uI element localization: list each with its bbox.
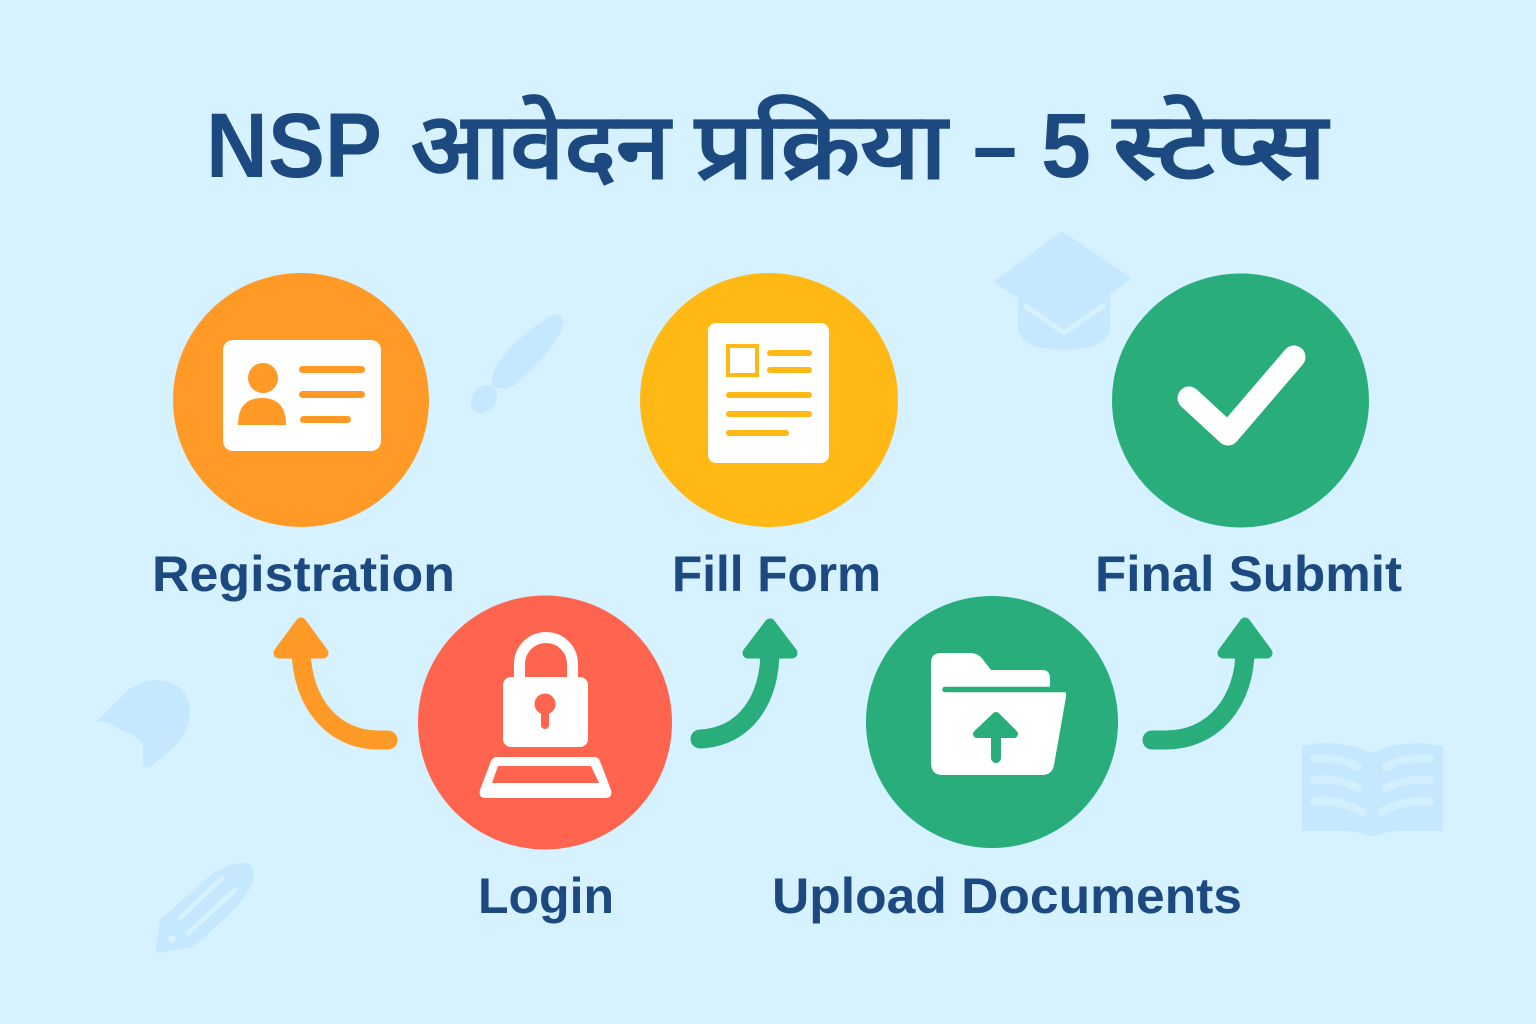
step: Registration (152, 273, 455, 602)
icon: orange circle with ID card (173, 273, 429, 527)
step: Login (418, 596, 672, 924)
decorative icon: open book (1302, 743, 1443, 837)
label: Registration: Registration (152, 546, 455, 602)
icon: red circle with padlock and keyboard (418, 596, 672, 850)
decorative icon: pencil (155, 863, 254, 953)
icon: yellow circle with document (640, 273, 898, 527)
title: NSP (206, 95, 382, 197)
icon: green circle with folder upload (866, 596, 1118, 848)
step: Final Submit (1095, 274, 1402, 602)
label: Final Submit: Final Submit (1095, 546, 1402, 602)
step: Fill Form (640, 273, 898, 602)
label: Fill Form: Fill Form (672, 546, 881, 602)
decorative icon: graduation cap (996, 233, 1129, 350)
title: 5 (1041, 95, 1091, 197)
title: आवेदन (411, 94, 673, 198)
icon: green circle with check mark (1112, 274, 1369, 528)
arrow: Upload Documents to Final Submit (1152, 623, 1267, 740)
label: Login: Login (478, 868, 614, 924)
decorative icon: speech bubble (97, 680, 190, 768)
label: Upload Documents: Upload Documents (772, 868, 1242, 924)
arrow: Login to Registration (279, 623, 388, 740)
step: Upload Documents (772, 596, 1242, 924)
decorative icon: paint brush (466, 315, 564, 418)
title: प्रक्रिया (693, 94, 951, 198)
title: स्टेप्स (1111, 94, 1330, 198)
title: – (973, 95, 1017, 197)
title (206, 94, 1330, 198)
arrow: Login to Fill Form (700, 624, 792, 739)
